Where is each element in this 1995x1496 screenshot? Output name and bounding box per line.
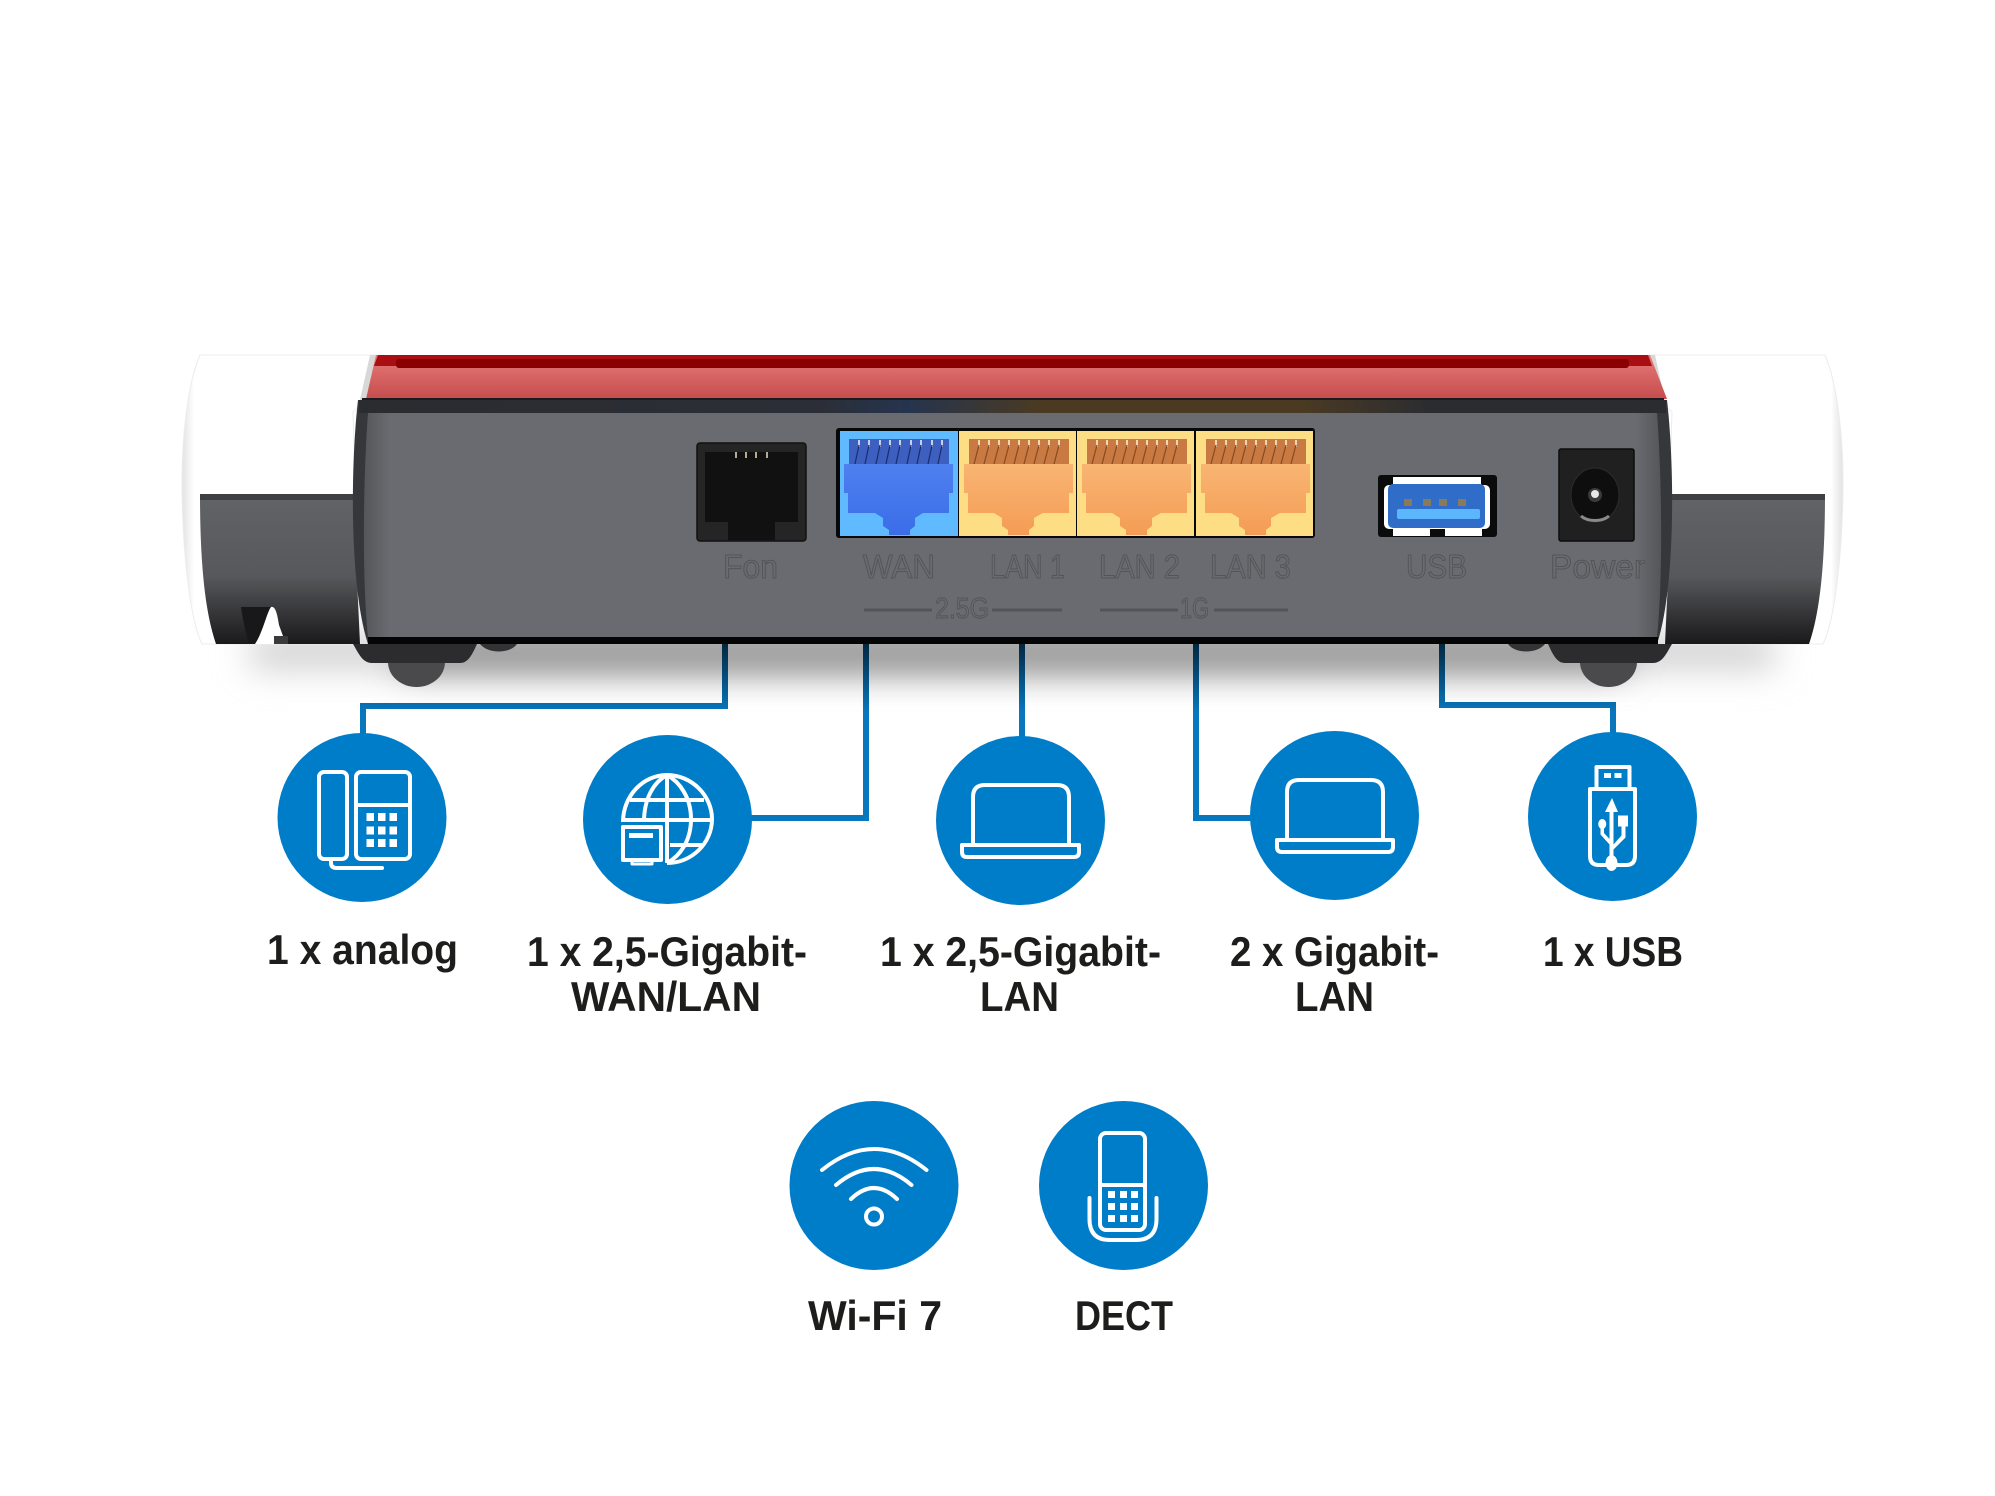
floor shadow under router <box>250 634 1775 672</box>
LAN 1 socket <box>959 431 1076 536</box>
line: USB to stick <box>1442 644 1613 734</box>
label: Wi-Fi 7: Wi-Fi 7 <box>808 1292 942 1339</box>
left side cap <box>182 355 376 644</box>
item: Gigabit LAN <box>1230 731 1439 1020</box>
item: WAN/LAN <box>527 735 807 1020</box>
dark fade on upper lines <box>863 644 1199 712</box>
item: Wi-Fi 7 <box>790 1101 958 1339</box>
connector lines <box>363 644 1613 818</box>
label: 2 x Gigabit-LAN: 2 x Gigabit- <box>1230 928 1439 975</box>
item: USB <box>1528 732 1697 975</box>
label: 2 x Gigabit-LAN: LAN <box>1295 973 1374 1020</box>
icon: laptop <box>1250 731 1419 900</box>
label: 1 x 2,5-Gigabit-LAN: LAN <box>980 973 1059 1020</box>
Power port <box>1559 449 1634 541</box>
embossed port labels: Fon <box>723 548 778 585</box>
dark back housing <box>353 400 1672 644</box>
label: 2 x Gigabit-LAN <box>1230 928 1439 1020</box>
embossed port labels <box>723 548 1645 625</box>
embossed port labels: 2.5G <box>935 593 989 625</box>
embossed port labels: USB <box>1406 548 1467 585</box>
label: 1 x 2,5-Gigabit-WAN/LAN: 1 x 2,5-Gigabit- <box>527 928 807 975</box>
right side cap <box>1649 355 1843 644</box>
label: 1 x analog: 1 x analog <box>267 926 458 973</box>
item: 2.5G LAN <box>880 736 1161 1020</box>
Fon port <box>697 443 806 541</box>
WAN socket <box>840 431 958 536</box>
label: 1 x 2,5-Gigabit-LAN <box>880 928 1161 1020</box>
embossed port labels: 1G <box>1180 593 1209 625</box>
line: LAN 2 to laptop <box>1196 644 1253 818</box>
item: analog phone <box>267 733 458 973</box>
embossed port labels: LAN 3 <box>1210 548 1291 585</box>
icon: wifi <box>790 1101 958 1270</box>
item: DECT <box>1039 1101 1208 1339</box>
router back view <box>182 355 1843 687</box>
embossed port labels: LAN 2 <box>1099 548 1180 585</box>
icon: USB stick <box>1528 732 1697 901</box>
left cable notch <box>241 607 288 644</box>
label: 1 x USB: 1 x USB <box>1543 928 1683 975</box>
line: LAN 1 to laptop <box>1019 644 1025 738</box>
label: DECT: DECT <box>1075 1292 1173 1339</box>
label: 1 x 2,5-Gigabit-WAN/LAN <box>527 928 807 1020</box>
LAN port block <box>836 428 1315 538</box>
left foot <box>353 637 517 687</box>
label: 1 x 2,5-Gigabit-LAN: 1 x 2,5-Gigabit- <box>880 928 1161 975</box>
icon: telephone <box>278 733 446 902</box>
line: Fon to analog <box>363 644 725 735</box>
icon: DECT handset in cradle <box>1039 1101 1208 1270</box>
icon: laptop <box>936 736 1105 905</box>
embossed port labels: WAN <box>863 548 935 585</box>
line: WAN to globe <box>750 644 866 818</box>
LAN 2 socket <box>1077 431 1194 536</box>
red top cover <box>362 355 1667 400</box>
embossed port labels: Power <box>1550 548 1645 585</box>
right foot <box>1508 637 1672 687</box>
icon: globe with LAN socket <box>583 735 752 904</box>
USB port <box>1378 475 1497 537</box>
label: 1 x 2,5-Gigabit-WAN/LAN: WAN/LAN <box>571 973 761 1020</box>
LAN 3 socket <box>1196 431 1313 536</box>
embossed port labels: LAN 1 <box>990 548 1065 585</box>
